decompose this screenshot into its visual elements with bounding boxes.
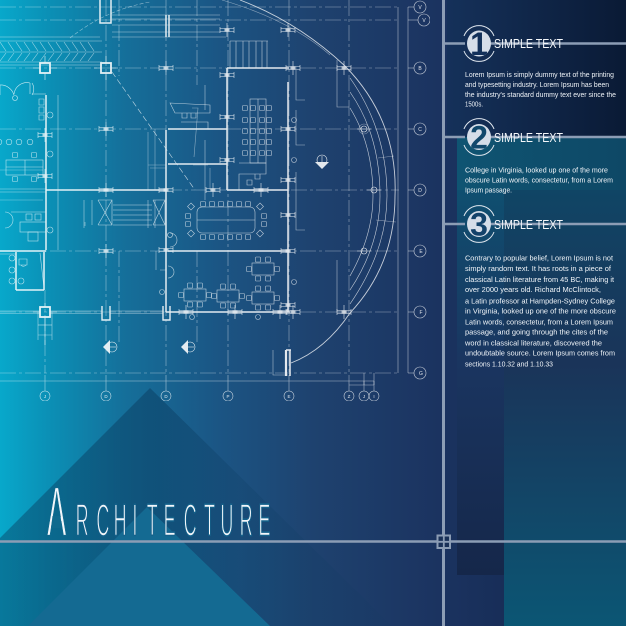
right panel: top section (447, 0, 626, 137)
heading: SIMPLE TEXT (494, 217, 563, 232)
body text: obscure Latin words, consectetur, from a Lorem (465, 178, 613, 184)
section 2 (445, 119, 626, 194)
curved wall arcs (70, 0, 396, 363)
body text (465, 168, 613, 194)
title (47, 474, 270, 551)
body text: undoubtable source. Lorem Ipsum comes from (465, 350, 615, 358)
axis lines (0, 0, 399, 381)
body text: and typesetting industry. Lorem Ipsum has been (465, 82, 609, 89)
body text: a Latin professor at Hampden-Sydney College (465, 298, 615, 306)
body text: in Virginia, looked up one of the more obscure (465, 308, 616, 316)
grid bubble letters, bottom: D (104, 394, 108, 399)
grid bubble letters, right (418, 5, 426, 377)
heading: SIMPLE TEXT (494, 130, 563, 145)
grid bubble letters, right: G (419, 371, 423, 377)
door swings (0, 83, 172, 238)
body text: Latin words, consectetur, from a Lorem Ipsum (465, 320, 613, 326)
grid bubble letters, bottom: Z (348, 394, 351, 399)
icon: number 1 (464, 26, 494, 62)
grid bubble letters, right: E (419, 249, 423, 255)
icon: number 3 (464, 206, 494, 242)
body text: classical Latin literature from 45 BC, making it (465, 277, 614, 284)
section 3 (445, 206, 626, 368)
grid bubble letters, right: D (418, 188, 422, 194)
grid bubble letters, right: V (418, 5, 422, 11)
structural column squares (33, 56, 170, 345)
body text: Lorem Ipsum is simply dummy text of the printing (465, 72, 614, 79)
body text: College in Virginia, looked up one of the more (465, 168, 608, 174)
body text: sections 1.10.32 and 1.10.33 (465, 362, 553, 368)
right panel: lower section (504, 190, 626, 626)
grid bubble letters, right: B (418, 66, 422, 72)
grid bubble letters, bottom: E (287, 394, 291, 399)
body text: passage, and going through the cites of the (465, 330, 608, 336)
title: A (47, 474, 66, 551)
architectural floor plan (0, 0, 430, 401)
body text (464, 256, 616, 368)
grid bubble letters, bottom: J (44, 394, 46, 399)
grid bubble letters, bottom: I (373, 394, 375, 399)
rule (445, 223, 626, 225)
body text: simply random text. It has roots in a piece of (465, 266, 611, 273)
icon: number 2 (464, 119, 494, 156)
grid bubbles, right (408, 1, 430, 379)
door axis columns and dims (0, 108, 210, 200)
icon: number 2: 2 (470, 120, 488, 156)
thick walls (0, 0, 291, 376)
body text: the industry's standard dummy text ever since the (465, 92, 616, 99)
rule (445, 136, 626, 138)
body text (465, 72, 616, 108)
right panel: narrow column (457, 190, 504, 575)
title: RCHITECTURE (76, 496, 270, 546)
icon: number 1: 1 (470, 26, 488, 62)
body text: over 2000 years old. Richard McClintock, (465, 287, 601, 294)
heading: SIMPLE TEXT (494, 36, 563, 51)
grid bubble letters, bottom (44, 394, 375, 399)
dark triangle (0, 388, 392, 626)
light triangle (28, 507, 270, 626)
hatched band (0, 37, 102, 65)
section tags (103, 155, 329, 354)
grid bubble letters, bottom: D (164, 394, 168, 399)
dimension lines (0, 7, 408, 391)
body text: Contrary to popular belief, Lorem Ipsum is not (465, 256, 613, 262)
grid bubbles, bottom (40, 391, 379, 401)
grid bubble letters, right: F (419, 310, 423, 316)
grid bubble letters, bottom: J (363, 394, 365, 399)
section 1 (445, 26, 626, 108)
body text: Ipsum passage. (465, 188, 512, 194)
grid bubble letters, right: V (422, 18, 426, 24)
body text: 1500s. (465, 102, 483, 108)
body text: word in classical literature, discovered the (464, 340, 602, 348)
rule (445, 42, 626, 45)
grid bubble letters, bottom: P (226, 394, 230, 399)
stairs (98, 41, 268, 225)
column markers (38, 23, 381, 319)
room furniture (0, 99, 296, 320)
icon: number 3: 3 (470, 206, 488, 242)
right panel: teal band (457, 137, 626, 190)
grid bubble letters, right: C (418, 127, 422, 133)
